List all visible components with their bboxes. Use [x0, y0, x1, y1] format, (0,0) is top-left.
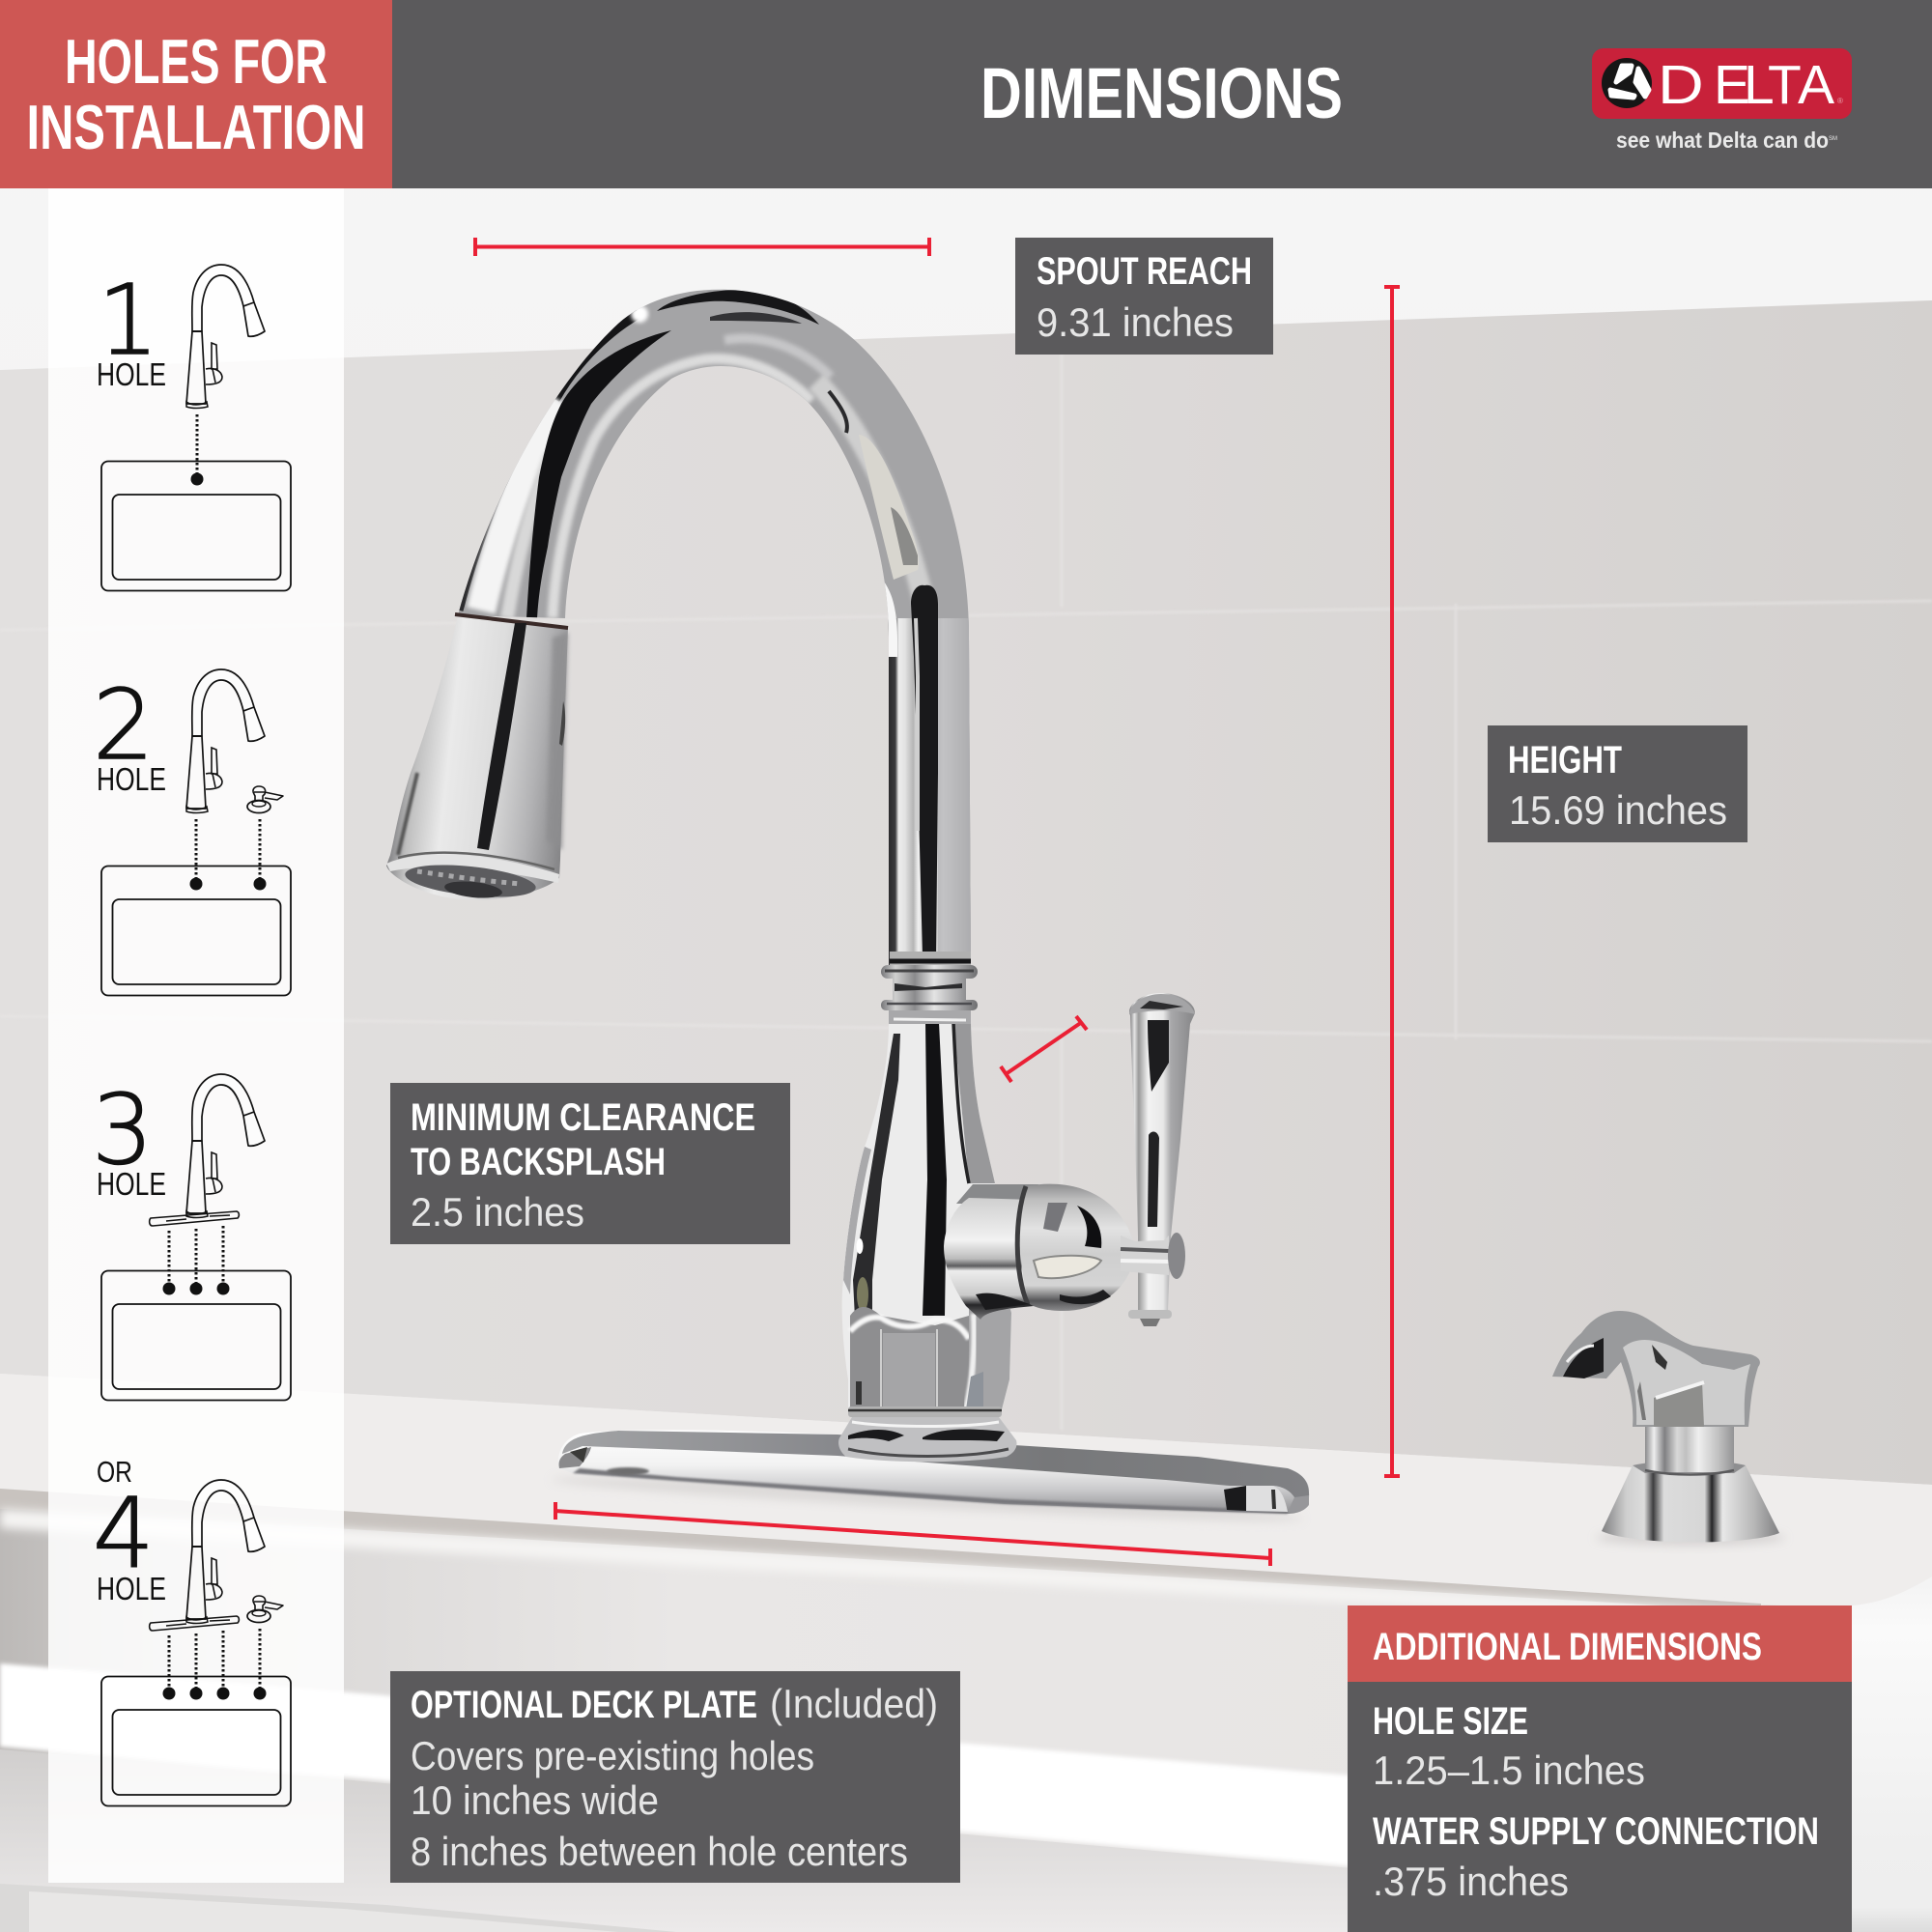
- deck plate: [551, 1430, 1309, 1527]
- callout: minimum clearance: [390, 1083, 790, 1244]
- callout: optional deck plate: 10 inches wide: [411, 1777, 659, 1823]
- dimension line: height: [1384, 286, 1400, 1476]
- callout: spout reach: SPOUT REACH: [1037, 250, 1252, 293]
- soap dispenser: [1552, 1311, 1785, 1546]
- option: 1 hole: [97, 264, 291, 591]
- title: dimensions: DIMENSIONS: [980, 53, 1343, 133]
- Delta logo: see what Delta can do: [1616, 128, 1829, 153]
- option: or 4 hole: HOLE: [97, 1571, 166, 1606]
- option: or 4 hole: [93, 1455, 291, 1806]
- dimension line: backsplash clearance: [1001, 1016, 1087, 1082]
- option: or 4 hole: OR: [97, 1455, 132, 1489]
- panel: additional dimensions: HOLE SIZE: [1373, 1700, 1528, 1743]
- option: 3 hole: 3: [92, 1073, 154, 1186]
- callout: minimum clearance: MINIMUM CLEARANCE: [411, 1096, 755, 1139]
- main faucet photo illustration: [386, 290, 1309, 1527]
- pull-down spray head: [386, 614, 568, 902]
- header bar: dark grey: [392, 0, 1932, 188]
- callout: height: HEIGHT: [1508, 739, 1622, 781]
- option: 1 hole: 1: [98, 264, 159, 377]
- spout arc: [458, 290, 976, 966]
- option: 2 hole: 2: [93, 668, 155, 781]
- Delta logo: D: [1658, 54, 1704, 116]
- option: 3 hole: [92, 1073, 291, 1401]
- option: or 4 hole: 4: [93, 1477, 155, 1590]
- faucet body and base: [838, 1023, 1017, 1462]
- callout: optional deck plate: [390, 1671, 960, 1883]
- panel: additional dimensions: WATER SUPPLY CONNECTION: [1373, 1810, 1819, 1853]
- panel: additional dimensions: ADDITIONAL DIMENSIONS: [1373, 1626, 1762, 1668]
- header panel: holes for installation: INSTALLATION: [27, 92, 365, 162]
- callout: minimum clearance: 2.5 inches: [411, 1189, 584, 1235]
- callout: optional deck plate: 8 inches between hole centers: [411, 1829, 908, 1874]
- dimension line: spout reach: [474, 238, 930, 256]
- callout: optional deck plate: OPTIONAL DECK PLATE: [411, 1684, 757, 1726]
- callout: optional deck plate: (Included): [770, 1681, 938, 1726]
- dimension line: deck plate width: [554, 1502, 1270, 1566]
- option: 2 hole: HOLE: [97, 761, 166, 797]
- Delta logo: ®: [1837, 97, 1843, 105]
- sidebar panel: hole options: [48, 188, 344, 1883]
- collar rings: [881, 952, 978, 1024]
- Delta logo: ELTA: [1714, 54, 1834, 116]
- option: 3 hole: HOLE: [97, 1166, 166, 1202]
- callout: height: [1488, 725, 1747, 842]
- header panel: holes for installation: [0, 0, 392, 188]
- panel: additional dimensions: 1.25–1.5 inches: [1373, 1747, 1645, 1793]
- option: 2 hole: [93, 668, 291, 995]
- Delta logo: SM: [1829, 136, 1837, 142]
- header panel: holes for installation: HOLES FOR: [65, 26, 327, 97]
- panel: additional dimensions: .375 inches: [1373, 1859, 1569, 1904]
- callout: minimum clearance: TO BACKSPLASH: [411, 1141, 666, 1183]
- callout: height: 15.69 inches: [1509, 787, 1727, 833]
- callout: optional deck plate: Covers pre-existing holes: [411, 1733, 814, 1778]
- Delta logo: [1592, 48, 1852, 153]
- panel: additional dimensions: [1348, 1605, 1852, 1932]
- callout: spout reach: [1015, 238, 1273, 355]
- handle hub: [944, 1184, 1134, 1320]
- handle lever: [1121, 993, 1195, 1326]
- callout: spout reach: 9.31 inches: [1037, 299, 1234, 345]
- option: 1 hole: HOLE: [97, 356, 166, 392]
